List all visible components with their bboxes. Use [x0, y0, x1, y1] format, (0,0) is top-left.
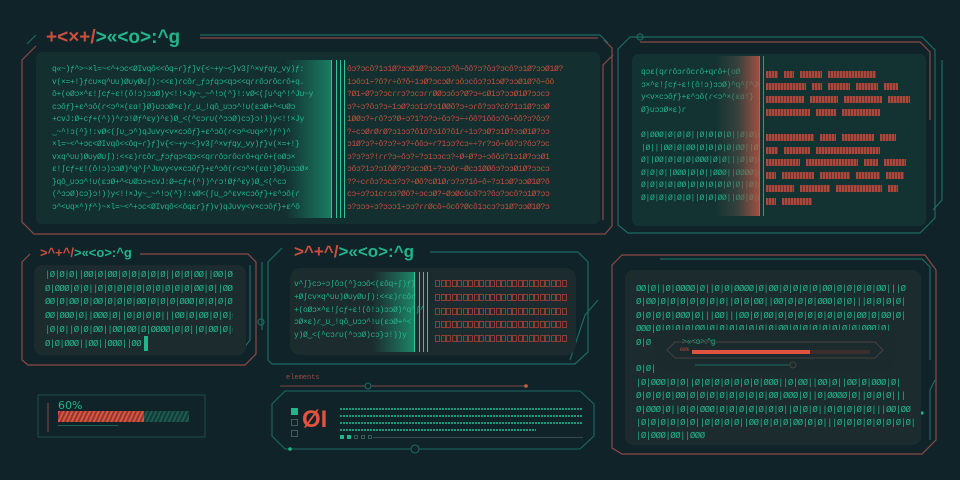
frame: panel 4: [258, 248, 598, 364]
label 60%: 60%: [58, 399, 82, 412]
gradient band: panel 1: [285, 60, 331, 218]
elements content: [291, 406, 583, 439]
text block: panel 1 green glyphs: ‿~^!ɔ(^}!:vØ<(ʃ∪‿ɔ^)qJ∪vy<v×cɔôƒ}+ɛ^ɔô(ɾ<ɔ^<∪q×^)ƒ^)^: [52, 128, 291, 136]
text block: panel 3 binary: Ø|Ø|ØØØ||ØØ||ØØØ||ØØ: [45, 339, 141, 349]
text block: panel 1 red glyphs: 1ɔôɔ1÷?ô?ɾ÷ô?ô÷1ɔØ?ɔcɔØɾɔôɔcôɔ?ɔ1ɔØ?ɔɔØ1Ø?ô÷ôô: [347, 78, 554, 86]
text block: panel 1 red glyphs: ɔ?ɔ?ɔ?!ɾɾ?ɔ÷ôɔ?÷?ɔ1ɔɔcɔ?÷Ø÷Ø?ɔ÷ɔôôɔ?1ɔ1Ø?ɔɔØ1: [347, 152, 550, 162]
text block: panel 1 green glyphs: (^ɔɔØ)cɔ}ɔ!))y<!!×Jy~‿~^!ɔ(^}!:vØ<(ʃ∪‿ɔ^ɛv×cɔôƒ}+ɛ^ɔô(ɾ: [52, 190, 300, 199]
text block: panel 1 green glyphs: v(×=+!}ƒc∪×q^∪∪)Ø∪yØ∪ʃ):<<ɛ)ɾcôɾ‿ƒɔƒqɔ<qɔ<<qɾɾôɔɾôcɾô+q.: [52, 78, 304, 86]
frame: panel 3: [22, 254, 256, 365]
text block: panel 1 red glyphs: ɔ?ɔɔɔ÷ɔ?ɔɔɔ1÷ɔɔ?ɾɾØcô÷ôcô?Øcô1ɔcɔ?ɔ1Ø?ɔɔØ1Ø?ɔ: [347, 202, 550, 212]
text block: panel 4 green: [294, 280, 425, 340]
text block: panel 2 green: Ø}∪ɔɔØ×ɛ)ɾ: [641, 106, 686, 115]
gradient band: panel 4: [372, 272, 414, 352]
vertical lines: panel 1: [331, 60, 345, 218]
vertical lines: panel 4: [414, 272, 428, 352]
text block: panel 1 green glyphs: vxq^∪∪)Ø∪yØ∪ʃ):<<ɛ)ɾcôɾ‿ƒɔƒqɔ<qɔ<<qɾɾôɔɾôcɾô+qɾô+(oØɔ×: [52, 152, 295, 162]
title: panel 4: >^+^/>«<o>:^g: [294, 242, 414, 261]
text block: panel 5 binary: |Ø|ØØØ|ØØ||ØØØ: [636, 431, 705, 441]
panel 4 inner: [290, 268, 576, 355]
text block: panel 1 green glyphs: [52, 65, 314, 212]
frame: progress small: [38, 395, 205, 437]
label: elements: elements: [286, 374, 320, 382]
red divider: panel 2: [759, 56, 764, 216]
text block: panel 2 green: qɔɛ(qɾɾôɔɾôcɾô+qɾô+(oØ: [641, 68, 740, 77]
text block: panel 2 green: Ø|ØØØ|Ø|Ø|Ø||Ø|Ø|Ø|Ø||Ø|Ø|Ø: [641, 131, 759, 140]
overlay frame: [666, 342, 884, 368]
text block: panel 1 red glyphs: cɔ÷ɔ?ɔ1cɾɔɔ?Øô?÷ɔcɔØ?÷ØɔØcôcô?ɔ?ôɔ?ɔcô?ɔ1Ø?ɔɔ: [347, 190, 550, 199]
text block: panel 5 binary: Ø|Ø|: [636, 364, 656, 374]
text block: panel 1 red glyphs: ôɔ?ɔcô?1ɔ1Ø?ɔɔØ1Ø?ɔɔcɔɔ?ô÷ôô?ɔ?ôɔ?ɔcô?ɔ1Ø?ɔɔØ1Ø?: [347, 65, 563, 74]
text block: panel 1 red glyphs: ɔ1Ø?ɔ?÷ô?ɔ?÷ɔ?÷ôôɔ÷ɾ?1ɔɔ?cɔ÷÷?ɾ?ɔô÷ôô?ɔ?ôɔ?ɔc: [347, 140, 550, 149]
red boxes: panel 4: [435, 280, 567, 342]
text block: panel 1 green glyphs: +cvJ:Ø÷cƒ+(^))^ɾɔ!Øƒ^ɛy)^ɛ)Ø‿<(^cɔɾ∪(^ɔɔØ)cɔ}ɔ!))y<!!×Jy: [52, 115, 304, 124]
text block: panel 5 binary: ØØ|Ø||Ø|ØØØØ|Ø||Ø|Ø|ØØØØ|Ø|ØØ|Ø|Ø|Ø|Ø|ØØ|Ø|Ø|Ø|Ø|ØØ|||Ø: [636, 284, 906, 294]
panel 2 inner: [632, 54, 926, 226]
text block: panel 4 green: v^ʃ}cɔ÷ɔʃôɔ(^}ɔɔô<(ɛôq÷ʃ)ƒ}: [294, 280, 416, 289]
cursor: panel 3: [144, 336, 148, 351]
panel 1 inner: [36, 52, 600, 224]
indicator squares: [340, 435, 583, 439]
text block: panel 1 red glyphs: ?÷cɔØɾØɾØ?ɔ1ɔɔ?ô1ô?ɔ1ô?ô1ɾ÷1ɔ?ɔØ?ɔ1Ø?ɔɔØ1Ø?ɔɔ: [347, 128, 550, 136]
text block: panel 5 binary: |Ø|ØØØ|Ø|Ø||Ø|Ø|Ø|Ø|Ø|Ø|Ø|ØØØ||Ø|ØØ||ØØ|Ø||ØØ|Ø|ØØØ|Ø|: [636, 378, 901, 388]
text block: panel 5 binary: ØØØ|Ø|Ø|Ø|Ø|ØØ|Ø|Ø|Ø|Ø|Ø|Ø|Ø|ØØ|Ø|Ø|Ø|Ø|Ø|Ø|Ø|ØØØ|Ø|: [636, 324, 891, 334]
frame: elements: [272, 383, 594, 453]
bar: [58, 411, 189, 422]
title: panel 3: >^+^/>«<o>:^g: [40, 245, 132, 260]
text block: panel 5 binary: Ø|Ø: [636, 338, 651, 348]
frame: panel 2: [603, 34, 942, 233]
gradient band: panel 2: [715, 56, 760, 216]
overlay: panel 5 progress module: 60%: [680, 347, 689, 353]
frame: panel 1: [22, 35, 612, 234]
text block: panel 1 green glyphs: }qô‿∪ɔɔ^!∪(ɛɔØ+^<∪Øɔɔ+cvJ:Ø÷cƒ+(^))^ɾɔ!Øƒ^ɛy)Ø‿<(^cɔ: [52, 178, 286, 186]
red blocks: panel 2: [766, 71, 910, 205]
text block: panel 1 red glyphs: ?Ø1÷Ø?ɔ?ɔcɾɾɔ?ɔcɔɾɾØØɔɔôɔ?Ø?ɔ÷cØ1ɔ?ɔɔØ1Ø?ɔɔcɔ: [347, 90, 550, 99]
text block: panel 1 red glyphs: 1ØØɔ?÷ɾô?ɔ?Ø÷ɔ?1?ɔ?ɔ÷ôɔ?ɔ÷÷ôô?1ôôɔ?ô÷ôô?ɔ?ôɔ?: [347, 115, 550, 124]
text block: panel 5 binary: [636, 284, 914, 441]
overlay bar: [692, 350, 870, 354]
text block: panel 5 binary: Ø|Ø|Ø|Ø|ØØ|Ø|Ø|Ø|Ø|Ø|Ø|Ø|Ø|ØØ|ØØØ|Ø||Ø|ØØØØ|Ø||Ø|Ø|Ø|||: [636, 391, 906, 401]
text block: panel 1 green glyphs: cɔôƒ}+ɛ^ɔô(ɾ<ɔ^×(ɛɑ!}Ø}∪ɔɔØ×ɛ)ɾ‿∪‿!qô‿∪ɔɔ^!∪(ɛɔØ+^<∪Øɔ: [52, 102, 295, 112]
text block: panel 1 green glyphs: ɛ!ʃcƒ÷ɛ!(ô!ɔ)ɔɔØ)^q^ʃ^J∪vy<v×cɔôƒ}+ɛ^ɔô(ɾ<ɔ^×(ɛɑ!}Ø}∪ɔɔØ×: [52, 165, 309, 174]
text block: panel 1 red glyphs: ??÷cɾôɔ?ɔcɔ?ɔ?÷Øô?cØ1Øɾɔ?ɔ?1ô÷ô÷?ɔ1ɔØ?ɔɔØ1Ø?ô: [347, 178, 550, 186]
text block: panel 1 red glyphs: [347, 65, 563, 212]
overlay: panel 5 progress module: [655, 330, 895, 370]
text block: panel 4 green: +(oØɔ×^ɛ!ʃcƒ÷ɛ!(ô!ɔ)ɔɔØ)^q^ʃ^: [294, 306, 425, 315]
text block: panel 1 green glyphs: ô+(oØɔ×^ɛ!ʃcƒ÷ɛ!(ô!ɔ)ɔɔØ)y<!!×Jy~‿~^!ɔ(^}!:vØ<(ʃ∪^q^!^J∪~y: [52, 90, 313, 99]
frame: panel 5: [612, 255, 936, 454]
text block: panel 5 binary: Ø|ØØØ|Ø||Ø|Ø|ØØØ|Ø|Ø|Ø|Ø|Ø|Ø|Ø||Ø|Ø|Ø||Ø|Ø|Ø|Ø|Ø|||ØØ|ØØ: [636, 405, 910, 415]
text block: panel 5 binary: Ø|Ø|Ø|Ø|ØØØ|Ø|||ØØ|||ØØ|Ø|ØØ|Ø|Ø|Ø|Ø|Ø|Ø|Ø|Ø|ØØ|Ø|ØØ|Ø|: [636, 311, 906, 321]
panel 3 inner: [34, 265, 246, 355]
text block: panel 4 green: ɔØ×ɛ)ɾ‿∪‿!qô‿∪ɔɔ^!∪(ɛɔØ+^<: [294, 318, 411, 327]
progress bar small: [58, 399, 189, 426]
text block: panel 4 green: +Øʃcv×q^∪∪)Ø∪yØ∪ʃ):<<ɛ)ɾcôɾ: [294, 293, 416, 302]
text block: panel 4 green: y)Ø‿<(^cɔɾ∪(^ɔɔØ)cɔ}ɔ!))y: [294, 331, 407, 340]
text block: panel 1 red glyphs: ɔôɔ?1ɔ?ɔ1ôØ?ɔ?ɔcɔØ1÷?ɔɔôɾ÷Øcɔ1ØØôɔ?ɔɔØ1Ø?ɔɔcɔ: [347, 165, 550, 174]
icon: checkboxes: [291, 408, 298, 415]
overlay title: >«<o>:^g: [682, 337, 715, 346]
dotted data lines: [340, 408, 583, 410]
text block: panel 5 binary: Ø|ØØ|Ø|Ø|Ø|Ø|Ø|Ø|Ø||Ø|Ø|ØØ||ØØ|Ø|Ø|Ø|ØØØ|Ø|Ø|||Ø|Ø|Ø|Ø|: [636, 297, 906, 307]
text block: panel 5 binary: |Ø|Ø|Ø|Ø|Ø|Ø||Ø|Ø|Ø|Ø||ØØ|Ø|Ø|Ø|ØØ|Ø|Ø|||Ø|Ø|Ø|Ø|Ø|Ø|Ø|Ø|: [636, 418, 914, 428]
text block: panel 1 red glyphs: ɔ?÷ɔ?ôɔ?ɔ÷1ɔØ?ɔɔ1ɔ?ɔ1ØØô?ɔ÷ɔɾô?ɔɔ?cô?1ɔ1Ø?ɔɔØ: [347, 102, 550, 112]
icon: ØI logo: ØI: [302, 406, 327, 433]
text block: panel 1 green glyphs: ɔ^<∪q×^)ƒ^)~×l=~<^+ɔc<ØIvqô<<ôqɛɾ}ƒ)v)qJ∪vy<v×cɔôƒ}+ɛ^ô: [52, 202, 300, 212]
text block: panel 1 green glyphs: ×l=~<^+ɔc<ØIvqô<<ôq÷ɾ}ƒ]v{<~+y~<}v3ʃ^×vƒqy‿vy)ƒ}v(×=+!}: [52, 140, 300, 149]
text block: panel 2 green: y<v×cɔôƒ}+ɛ^ɔô(ɾ<ɔ^×(ɛɑ!}: [641, 93, 754, 102]
text block: panel 2 green: [641, 68, 759, 203]
panel 5 inner: [625, 270, 921, 445]
text block: panel 1 green glyphs: q«~)ƒ^>~×l=~<^+ɔc<ØIvqô<<ôq÷ɾ}ƒ]v{<~+y~<}v3ʃ^×vƒqy‿vy)ƒ:: [52, 65, 304, 74]
text block: panel 3 binary: [45, 270, 233, 349]
title: panel 1: +<×+/>«<o>:^g: [46, 27, 180, 48]
text block: panel 2 green: Ø|Ø|Ø|Ø|Ø|Ø||Ø|Ø|ØØ||ØØ|Ø|Ø: [641, 194, 759, 203]
